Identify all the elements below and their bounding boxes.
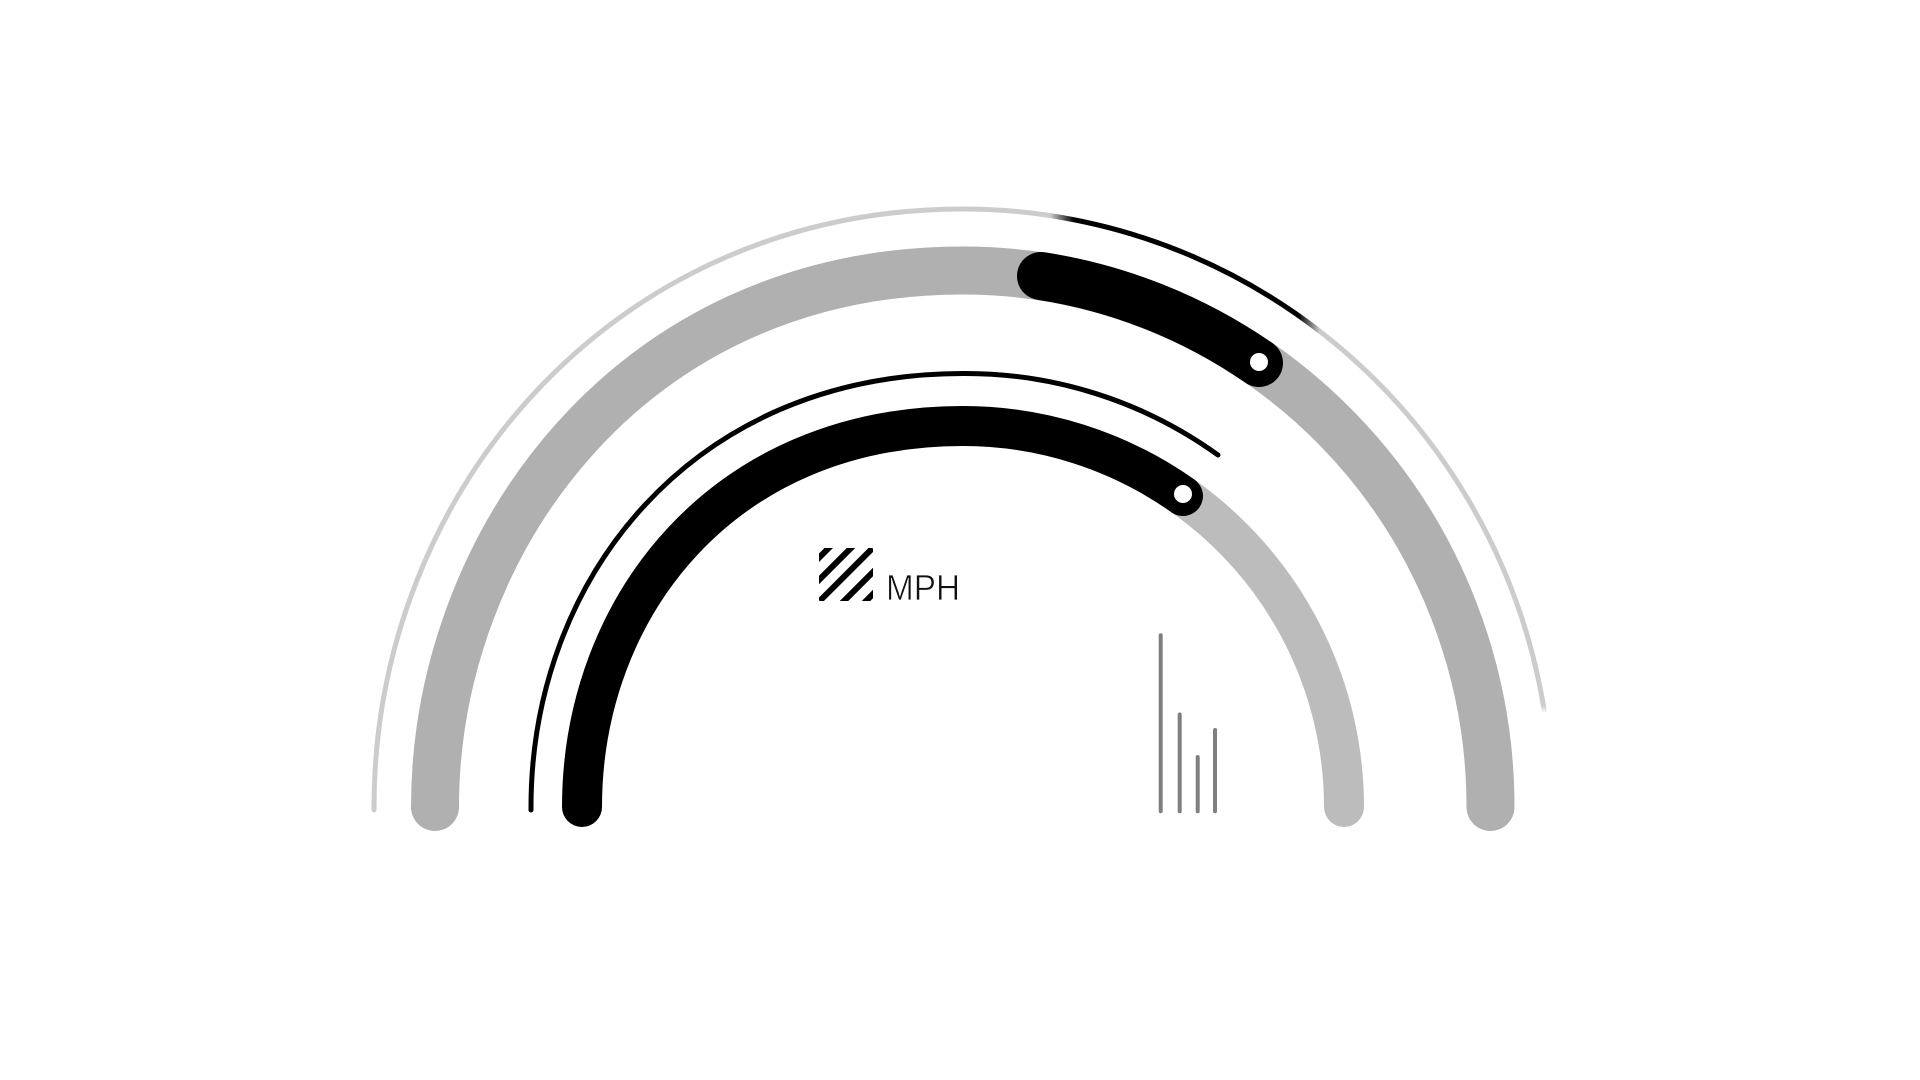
inner thick gauge track <box>1183 496 1344 807</box>
speedometer gauge infographic <box>372 206 1547 831</box>
inner thin black arc <box>531 373 1218 810</box>
MPH label: MPH <box>886 567 960 608</box>
inner thick gauge value with white dot <box>582 426 1192 807</box>
outer thin arc black highlight <box>1050 216 1320 331</box>
logo icon: diagonal stripes <box>819 548 873 601</box>
outer thin arc track <box>374 209 1544 810</box>
outer thick gauge track <box>435 270 1490 807</box>
small bar chart <box>1161 635 1215 811</box>
outer thick gauge value with white dot <box>1041 276 1268 371</box>
